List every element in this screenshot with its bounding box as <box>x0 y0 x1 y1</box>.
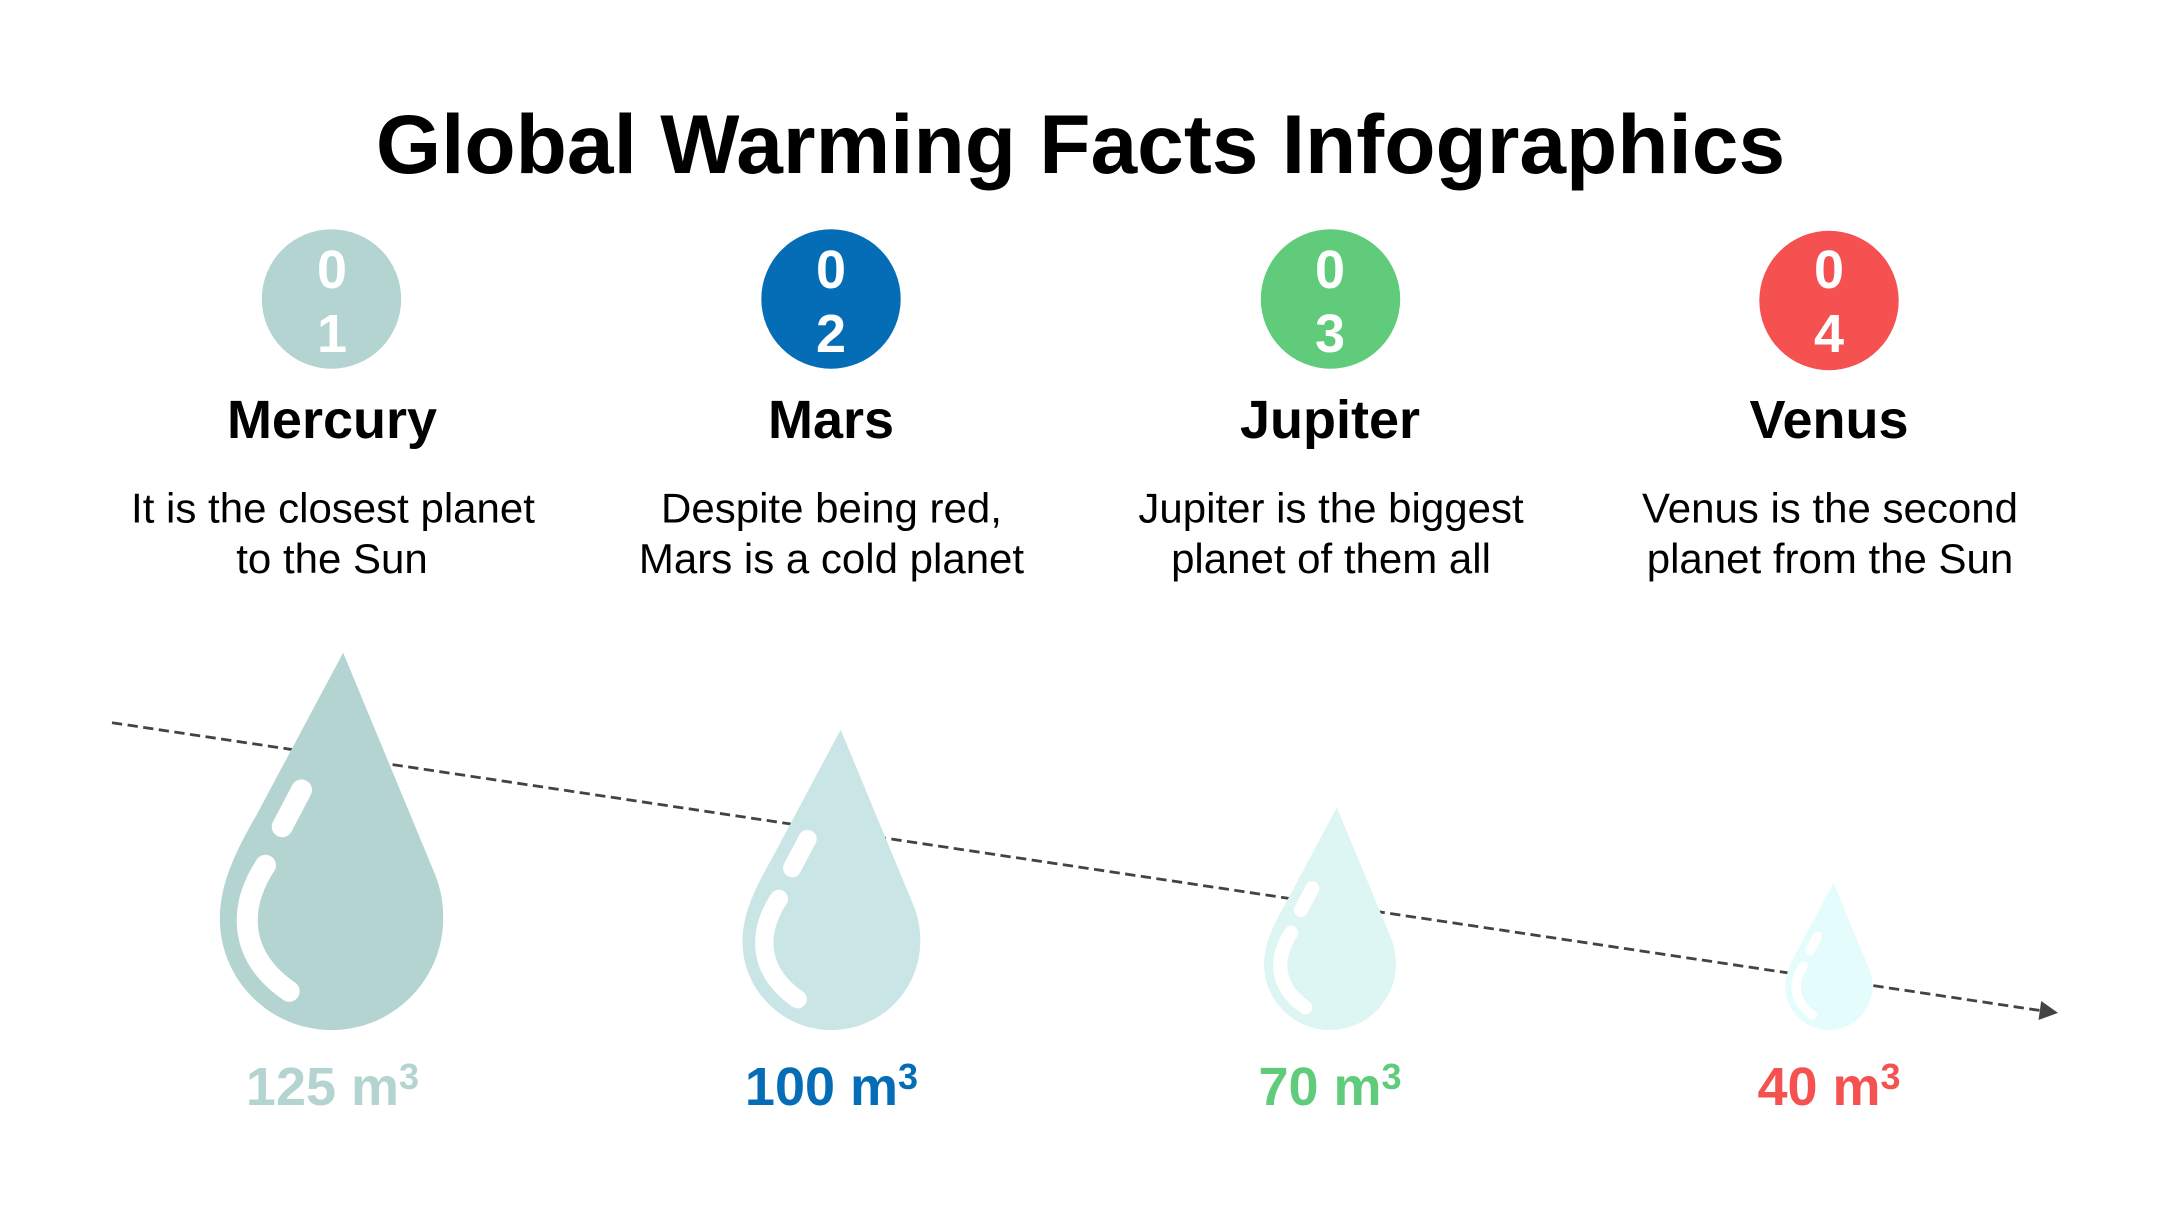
icon: water drop 100 <box>742 730 920 1030</box>
description: Mercury: to the Sun <box>236 535 428 582</box>
description: Mercury: It is the closest planet <box>131 484 535 532</box>
heading: Venus: Venus <box>1749 390 1909 450</box>
description: Venus: planet from the Sun <box>1647 535 2013 582</box>
badge 01 <box>262 229 401 369</box>
badge 03: 0 <box>1315 240 1345 300</box>
badge 03: 3 <box>1315 304 1345 364</box>
description: Jupiter: planet of them all <box>1171 535 1491 582</box>
value: 40 m3: 3 <box>1881 1056 1901 1097</box>
badge 01: 0 <box>317 240 347 300</box>
icon: water drop 40 <box>1785 883 1873 1030</box>
badge 01: 1 <box>317 304 347 364</box>
description: Jupiter: Jupiter is the biggest <box>1138 484 1524 532</box>
icon: water drop 125 <box>220 653 443 1030</box>
value: 125 m3: 3 <box>399 1056 419 1097</box>
badge 02: 0 <box>816 240 846 300</box>
badge 02 <box>761 229 901 369</box>
heading: Jupiter: Jupiter <box>1240 390 1420 450</box>
badge 02: 2 <box>816 304 846 364</box>
badge 04 <box>1759 231 1899 370</box>
value: 70 m3: 70 m <box>1258 1057 1382 1117</box>
panel: Mercury <box>131 229 535 1117</box>
value: 40 m3: 40 m <box>1757 1057 1881 1117</box>
title: Global Warming Facts Infographics <box>376 97 1785 191</box>
heading: Mercury: Mercury <box>227 390 437 450</box>
value: 100 m3: 3 <box>898 1056 918 1097</box>
value: 70 m3: 3 <box>1382 1056 1402 1097</box>
panel: Mars <box>639 229 1024 1117</box>
panel: Venus <box>1642 231 2018 1117</box>
description: Mars: Mars is a cold planet <box>639 535 1024 582</box>
heading: Mars: Mars <box>768 390 894 450</box>
badge 04: 0 <box>1814 240 1844 300</box>
description: Mars: Despite being red, <box>661 484 1002 532</box>
value: 100 m3: 100 m <box>745 1057 898 1117</box>
badge 03 <box>1261 229 1400 369</box>
icon: water drop 70 <box>1264 807 1396 1030</box>
value: 125 m3: 125 m <box>246 1057 399 1117</box>
panel: Jupiter <box>1138 229 1524 1117</box>
description: Venus: Venus is the second <box>1642 484 2018 532</box>
badge 04: 4 <box>1814 304 1844 364</box>
arrow: dashed declining trend line <box>112 723 2058 1020</box>
